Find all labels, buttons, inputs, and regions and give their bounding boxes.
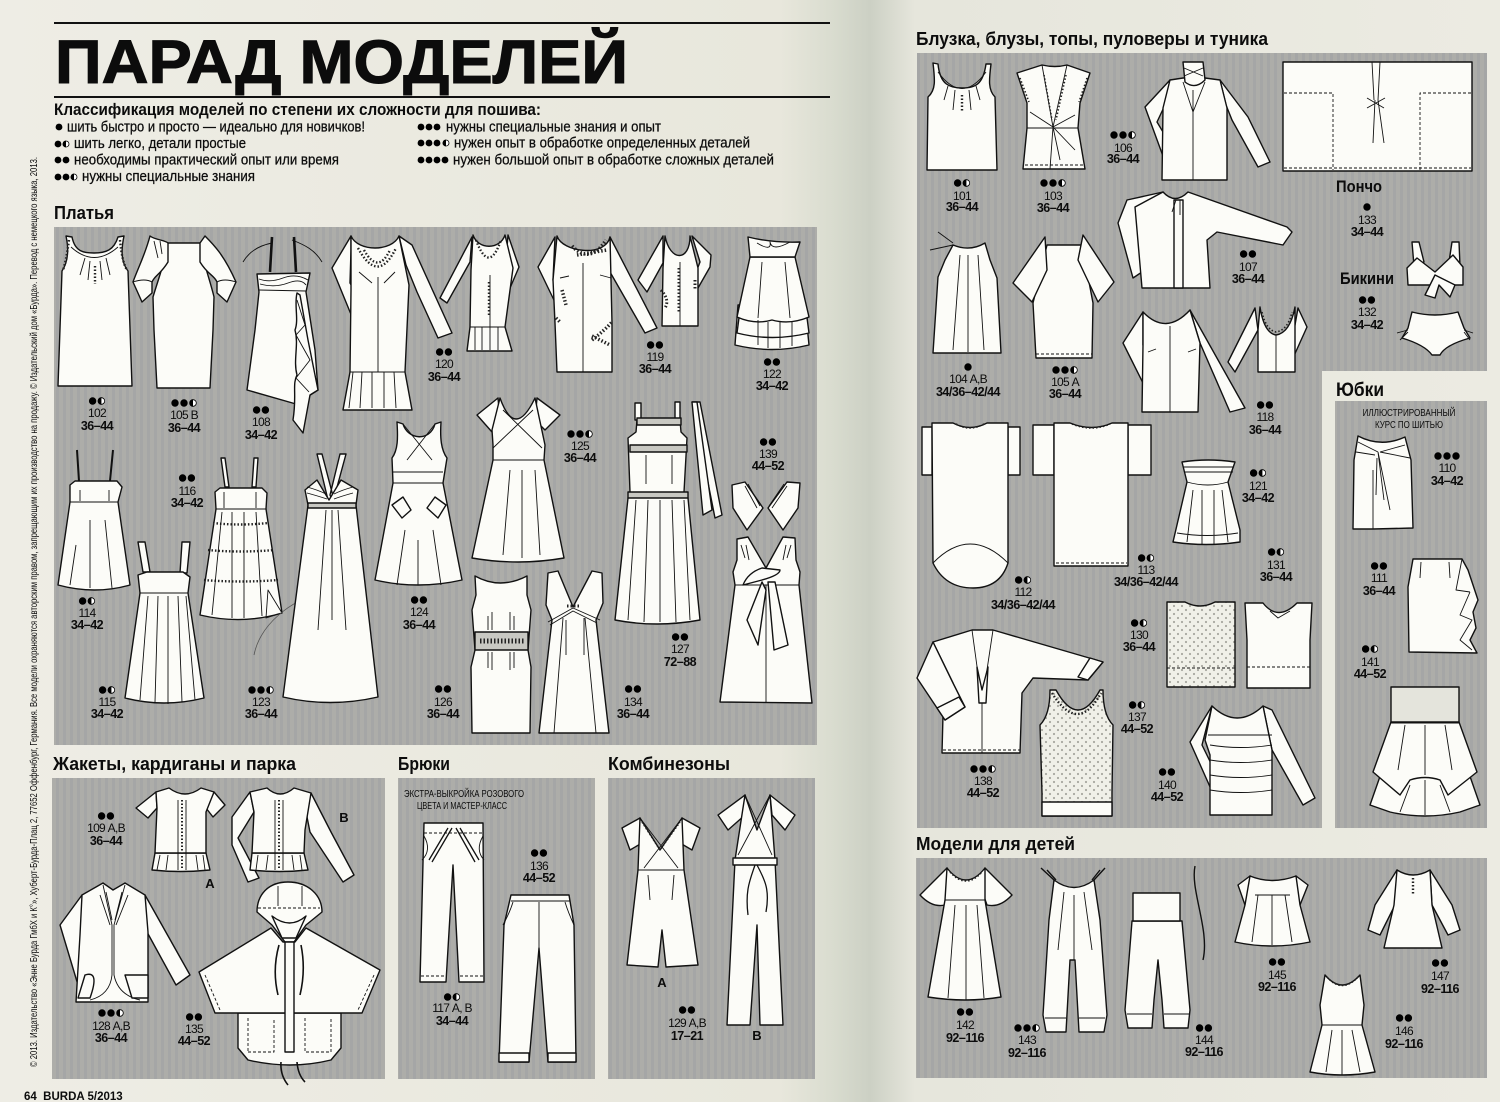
label 138: 44–52	[967, 786, 1000, 800]
dress 142	[920, 868, 1012, 1000]
label 110: 34–42	[1431, 474, 1464, 488]
jacket 107	[1118, 192, 1292, 288]
dress 116	[200, 458, 282, 620]
label 118: 36–44	[1249, 423, 1282, 437]
top 103	[1017, 65, 1090, 169]
label 140: 44–52	[1151, 790, 1184, 804]
label 107: 36–44	[1232, 272, 1265, 286]
top 105 A	[1013, 235, 1114, 358]
difficulty legend: шить быстро и просто — идеально для новичков!	[67, 120, 365, 136]
note: extra pattern	[404, 787, 524, 812]
bikini top	[1407, 242, 1463, 298]
label 117: 117 А, В	[432, 1001, 472, 1015]
label 117: 34–44	[436, 1014, 469, 1028]
variant letter B: В	[752, 1028, 762, 1043]
pullover 140	[1190, 706, 1315, 815]
label 112	[991, 576, 1056, 612]
note: sewing course	[1362, 406, 1456, 431]
dress 108	[243, 237, 322, 433]
label 123: 123	[252, 695, 271, 709]
label 113: 113	[1137, 563, 1156, 577]
jacket 138	[917, 630, 1103, 753]
label 121: 34–42	[1242, 491, 1275, 505]
stray thread line	[254, 593, 322, 655]
label 126	[427, 685, 460, 721]
label 145: 145	[1268, 968, 1287, 982]
label 146: 146	[1395, 1024, 1414, 1038]
label 119: 36–44	[639, 362, 672, 376]
label 125	[564, 430, 597, 465]
label 136: 136	[530, 859, 549, 873]
label 101	[946, 179, 979, 214]
difficulty legend: шить легко, детали простые	[74, 136, 246, 152]
label 106	[1107, 131, 1140, 166]
label 120	[428, 348, 461, 384]
label 107: 107	[1239, 260, 1258, 274]
panel: trousers	[398, 778, 595, 1079]
label 145: 92–116	[1258, 980, 1297, 994]
label 105 B: 105 B	[170, 408, 199, 422]
label 144	[1185, 1024, 1224, 1059]
dress 105 B	[133, 236, 236, 388]
label 130: 36–44	[1123, 640, 1156, 654]
label 137	[1121, 701, 1154, 736]
label 122: 122	[763, 367, 782, 381]
label 115	[91, 686, 124, 721]
label 108: 34–42	[245, 428, 278, 442]
label 105 B	[168, 399, 201, 435]
label 134: 36–44	[617, 707, 650, 721]
trousers 117	[420, 823, 484, 982]
label 143: 92–116	[1008, 1046, 1047, 1060]
gown 123	[283, 454, 378, 702]
label 111: 111	[1371, 571, 1388, 585]
label 105 A: 36–44	[1049, 387, 1082, 401]
top 121	[1173, 460, 1240, 545]
dress 120 front	[332, 236, 452, 410]
difficulty legend: нужны специальные знания	[82, 169, 255, 185]
label 144: 92–116	[1185, 1045, 1224, 1059]
label 138	[967, 765, 1000, 800]
variant letter B: В	[339, 810, 349, 825]
note: sewing course: ИЛЛЮСТРИРОВАННЫЙ	[1362, 406, 1456, 419]
title: ПАРАД МОДЕЛЕЙ	[55, 27, 628, 97]
label 111	[1363, 562, 1396, 598]
heading: kids: Модели для детей	[916, 834, 1075, 854]
title rule top and bottom	[54, 22, 830, 98]
label 126: 126	[434, 695, 453, 709]
variant letter A: А	[205, 876, 215, 891]
label 129: 17–21	[671, 1029, 704, 1043]
top 131	[1245, 603, 1312, 688]
label 106: 36–44	[1107, 152, 1140, 166]
dress 139	[720, 537, 812, 703]
dress 146	[1310, 975, 1375, 1075]
label 142: 142	[956, 1018, 975, 1032]
label 143	[1008, 1024, 1047, 1060]
label 113: 34/36–42/44	[1114, 575, 1179, 589]
label 128: 128 А,В	[92, 1019, 131, 1033]
blouse 118 back	[1228, 307, 1307, 372]
label 114: 34–42	[71, 618, 104, 632]
label 112: 34/36–42/44	[991, 598, 1056, 612]
label 101: 36–44	[946, 200, 979, 214]
label 134	[617, 685, 650, 721]
difficulty legend: нужен опыт в обработке определенных деталей	[454, 136, 750, 152]
label 137: 137	[1128, 710, 1147, 724]
label 142: 92–116	[946, 1031, 985, 1045]
label 109	[87, 812, 126, 848]
trousers 144	[1125, 866, 1205, 1028]
label 132: 132	[1358, 305, 1377, 319]
label 141	[1354, 645, 1387, 681]
blouse 145	[1235, 876, 1310, 946]
label 146	[1385, 1014, 1424, 1051]
skirt 111	[1408, 559, 1478, 653]
label 117	[432, 993, 472, 1028]
heading: trousers: Брюки	[398, 754, 450, 774]
label 111: 36–44	[1363, 584, 1396, 598]
label 130	[1123, 619, 1156, 654]
label 143: 143	[1018, 1033, 1037, 1047]
label 120: 120	[435, 357, 454, 371]
dress 125	[472, 398, 564, 562]
label 110	[1431, 452, 1464, 488]
bikini bottom	[1397, 312, 1473, 355]
label 131: 36–44	[1260, 570, 1293, 584]
label 142	[946, 1008, 985, 1045]
top 104 A,B	[930, 232, 1001, 353]
label 146: 92–116	[1385, 1037, 1424, 1051]
label 121	[1242, 469, 1275, 505]
label 137: 44–52	[1121, 722, 1154, 736]
dress 113	[1033, 423, 1151, 566]
label 106: 106	[1114, 141, 1133, 155]
dress 120 back	[440, 235, 519, 351]
poncho 133	[1283, 62, 1472, 171]
note: extra pattern: ЭКСТРА-ВЫКРОЙКА РОЗОВОГО	[404, 787, 524, 800]
label 135: 135	[185, 1022, 204, 1036]
dress 134	[539, 571, 609, 733]
label 140	[1151, 768, 1184, 804]
difficulty legend: Классификация моделей по степени их сложности для пошива:	[54, 101, 541, 119]
label 105 A	[1049, 366, 1082, 401]
panel: dresses	[54, 227, 817, 745]
label 127	[664, 633, 697, 669]
panel: jackets	[52, 778, 385, 1085]
jumpsuit 143	[1041, 868, 1107, 1032]
panel: skirts	[1335, 401, 1487, 828]
label 123	[245, 686, 278, 721]
label 140: 140	[1158, 778, 1177, 792]
label 108: 108	[252, 415, 271, 429]
label 105 A: 105 А	[1051, 375, 1080, 389]
label 147: 147	[1431, 969, 1450, 983]
label 102: 36–44	[81, 419, 114, 433]
label 119	[639, 341, 672, 376]
top 130	[1167, 602, 1235, 687]
blouse 106	[1145, 62, 1270, 180]
label 135	[178, 1013, 211, 1048]
note: extra pattern: ЦВЕТА И МАСТЕР-КЛАСС	[417, 801, 507, 812]
label 134: 134	[624, 695, 643, 709]
label 141: 141	[1361, 655, 1380, 669]
variant letter A: А	[657, 975, 667, 990]
label 124	[403, 596, 436, 632]
label 123: 36–44	[245, 707, 278, 721]
dress 102	[58, 236, 132, 386]
label 104	[936, 363, 1001, 399]
label 131: 131	[1267, 558, 1286, 572]
heading: poncho: Пончо	[1336, 178, 1382, 196]
label 128: 36–44	[95, 1031, 128, 1045]
label 147: 92–116	[1421, 982, 1460, 996]
label 105 B: 36–44	[168, 421, 201, 435]
panel: jumpsuits	[608, 778, 815, 1079]
label 102: 102	[88, 406, 107, 420]
label 130: 130	[1130, 628, 1149, 642]
skirt 110	[1353, 436, 1413, 529]
label 124: 36–44	[403, 618, 436, 632]
label 122	[756, 358, 789, 393]
label 139: 139	[759, 447, 778, 461]
dress 114	[58, 450, 130, 590]
label 115: 34–42	[91, 707, 124, 721]
dress 115	[125, 542, 204, 704]
label 104: 104 А,В	[949, 372, 988, 386]
label 136	[523, 849, 556, 885]
label 110: 110	[1438, 461, 1457, 475]
label 118	[1249, 401, 1282, 437]
label 112: 112	[1014, 585, 1033, 599]
label 101: 101	[953, 189, 972, 203]
dress 119 front	[538, 236, 657, 372]
jumpsuit 129 B	[718, 795, 795, 1025]
poncho jacket 135	[199, 882, 380, 1085]
label 133: 133	[1358, 213, 1377, 227]
heading: dresses: Платья	[54, 203, 114, 223]
note: sewing course: КУРС ПО ШИТЬЮ	[1375, 420, 1443, 431]
label 116	[171, 474, 204, 510]
label 125: 36–44	[564, 451, 597, 465]
label 147	[1421, 959, 1460, 996]
difficulty legend: необходимы практический опыт или время	[74, 152, 339, 168]
label 118: 118	[1256, 410, 1275, 424]
panel: kids	[916, 858, 1487, 1078]
label 135: 44–52	[178, 1034, 211, 1048]
difficulty legend	[54, 101, 774, 185]
label 124: 124	[410, 605, 429, 619]
collar 139	[732, 482, 800, 530]
label 116: 34–42	[171, 496, 204, 510]
label 113	[1114, 554, 1179, 589]
blouse 109 A	[136, 788, 225, 872]
label 127: 127	[671, 642, 690, 656]
label 103: 103	[1044, 189, 1063, 203]
label 119: 119	[646, 350, 665, 364]
difficulty legend: нужен большой опыт в обработке сложных деталей	[453, 152, 774, 168]
label 120: 36–44	[428, 370, 461, 384]
labels: dresses	[71, 341, 789, 721]
dress 127 and sash	[615, 402, 722, 624]
label 128	[92, 1009, 131, 1045]
dress 112	[922, 423, 1020, 588]
top 137	[1040, 690, 1113, 816]
label 131	[1260, 548, 1293, 584]
label 109: 109 А,В	[87, 821, 126, 835]
label 109: 36–44	[90, 834, 123, 848]
label 121: 121	[1249, 479, 1268, 493]
heading: jackets: Жакеты, кардиганы и парка	[52, 754, 297, 774]
label 136: 44–52	[523, 871, 556, 885]
blouse 147	[1368, 870, 1460, 948]
blouse 118 front	[1123, 310, 1245, 412]
heading: bikini: Бикини	[1340, 270, 1394, 288]
label 127: 72–88	[664, 655, 697, 669]
label 107	[1232, 250, 1265, 286]
label 129: 129 А,В	[668, 1016, 707, 1030]
heading: skirts: Юбки	[1336, 380, 1384, 401]
label 144: 144	[1195, 1033, 1214, 1047]
dress 122	[735, 237, 809, 350]
label 126: 36–44	[427, 707, 460, 721]
label 114	[71, 597, 104, 632]
label 103	[1037, 179, 1070, 215]
top 101	[927, 63, 997, 170]
label 114: 114	[78, 606, 97, 620]
heading: blouses: Блузка, блузы, топы, пуловеры и туника	[916, 29, 1269, 49]
label 102	[81, 397, 114, 433]
jacket 109 B	[232, 788, 354, 882]
label 125: 125	[571, 439, 590, 453]
trousers 136	[499, 895, 576, 1062]
label 133: 34–44	[1351, 225, 1384, 239]
label 141: 44–52	[1354, 667, 1387, 681]
label 122: 34–42	[756, 379, 789, 393]
dress 126	[471, 576, 531, 733]
skirt 141	[1370, 687, 1480, 816]
heading: jumpsuits: Комбинезоны	[608, 754, 730, 774]
label 103: 36–44	[1037, 201, 1070, 215]
panel: blouses	[917, 53, 1487, 828]
label 132	[1351, 296, 1384, 332]
label 116: 116	[178, 484, 197, 498]
cardigan 128	[60, 883, 190, 1002]
label 115: 115	[98, 695, 117, 709]
label 129	[668, 1006, 707, 1043]
label 139	[752, 438, 785, 473]
label 145	[1258, 958, 1297, 994]
jumpsuit 129 A	[622, 818, 700, 967]
dress 119 back	[638, 236, 711, 326]
label 132: 34–42	[1351, 318, 1384, 332]
label 108	[245, 406, 278, 442]
difficulty legend: нужны специальные знания и опыт	[446, 120, 661, 136]
label 138: 138	[974, 774, 993, 788]
label 133	[1351, 203, 1384, 239]
label 139: 44–52	[752, 459, 785, 473]
label 104: 34/36–42/44	[936, 385, 1001, 399]
dress 124	[375, 422, 462, 585]
